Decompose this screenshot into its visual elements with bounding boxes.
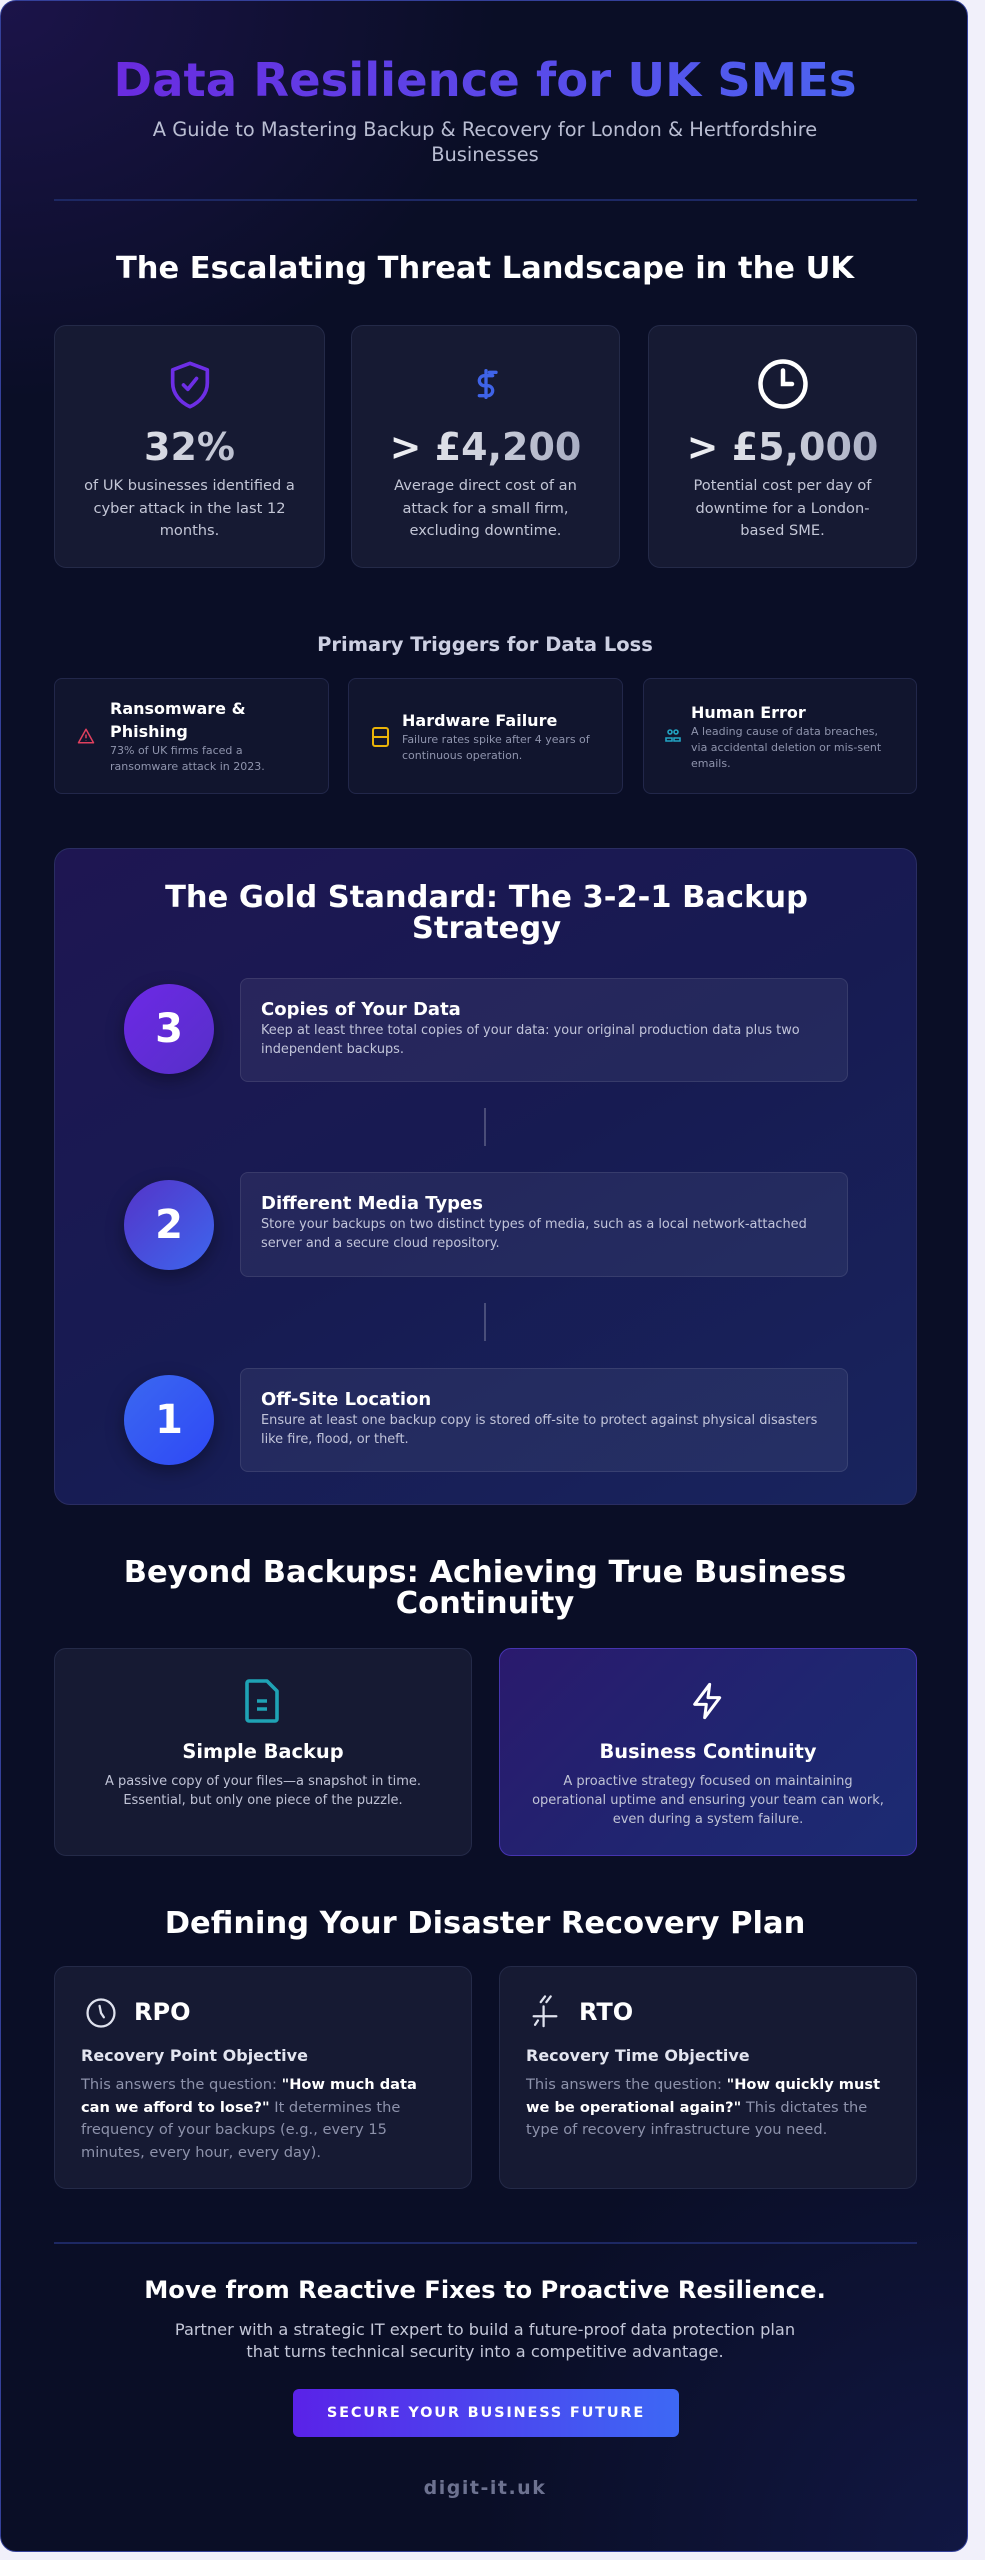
card: RTO — [499, 1966, 917, 2189]
box: media: Different Media Types — [261, 1193, 483, 1214]
stat card: £4,200 — [351, 325, 620, 568]
circle 2 — [124, 1180, 214, 1270]
icon: RPO clock — [86, 1998, 116, 2028]
trigger: ransomware: 73% of UK firms faced a — [110, 744, 243, 757]
card: RPO — [54, 1966, 472, 2189]
card: business continuity: A proactive strategy focused on maintaining — [563, 1774, 853, 1789]
heading: disaster recovery: Defining Your Disaster Recovery Plan — [165, 1906, 805, 1941]
card: RTO: type of recovery infrastructure you need. — [526, 2121, 827, 2138]
trigger: human error: via accidental deletion or mis-sent — [691, 740, 881, 754]
card: RTO: RTO — [579, 1998, 633, 2026]
card: business continuity — [499, 1648, 917, 1856]
card: RPO: minutes, every hour, every day). — [81, 2144, 321, 2161]
trigger: human error: Human Error — [691, 702, 806, 722]
icon: clock — [758, 359, 808, 409]
subtitle — [152, 118, 817, 166]
circle 2: 2 — [155, 1202, 183, 1248]
circle 1 — [124, 1375, 214, 1465]
card: simple backup: A passive copy of your files—a snapshot in time. — [105, 1774, 421, 1789]
icon: lightning — [693, 1682, 722, 1720]
box: copies: Copies of Your Data — [261, 999, 461, 1020]
circle 1: 1 — [155, 1397, 183, 1443]
box: offsite: Off-Site Location — [261, 1389, 431, 1410]
card: RPO: Recovery Point Objective — [81, 2046, 308, 2065]
stat card: £4,200: attack for a small firm, — [402, 500, 569, 516]
stat card: £5,000: downtime for a London- — [695, 500, 870, 516]
CTA text — [175, 2320, 795, 2361]
heading: threat landscape: The Escalating Threat Landscape in the UK — [116, 251, 854, 286]
card: RPO: can we afford to lose?" It determines the — [81, 2099, 400, 2116]
card: business continuity: Business Continuity — [600, 1740, 816, 1763]
stat card: £5,000 — [648, 325, 917, 568]
card: business continuity: even during a system failure. — [613, 1812, 803, 1827]
circle 3 — [124, 984, 214, 1074]
circle 3: 3 — [155, 1006, 183, 1052]
box: copies: Keep at least three total copies of your data: your original production data plus two — [261, 1023, 800, 1038]
icon: people — [665, 729, 681, 742]
icon: currency — [478, 369, 498, 399]
stat card: 32%: of UK businesses identified a — [84, 477, 295, 494]
CTA text: Partner with a strategic IT expert to build a future-proof data protection plan — [175, 2320, 795, 2339]
icon: server — [372, 727, 389, 747]
card: RTO: Recovery Time Objective — [526, 2046, 750, 2065]
card: RPO: frequency of your backups (e.g., every 15 — [81, 2121, 387, 2138]
card: RTO: we be operational again?" This dictates the — [526, 2099, 867, 2116]
stat card: 32%: cyber attack in the last 12 — [93, 500, 286, 516]
card: simple backup: Essential, but only one piece of the puzzle. — [123, 1793, 403, 1808]
stat card: 32% — [54, 325, 325, 568]
box: offsite — [240, 1368, 848, 1472]
heading: beyond backups: Beyond Backups: Achieving True Business — [124, 1555, 846, 1590]
trigger: human error: emails. — [691, 756, 731, 770]
stat card: 32%: 32% — [144, 425, 235, 469]
button: SECURE YOUR BUSINESS FUTURE — [327, 2405, 645, 2421]
icon: RTO — [532, 1995, 558, 2028]
card: RTO: This answers the question: "How quickly must — [526, 2076, 880, 2093]
card: RPO: This answers the question: "How much data — [81, 2076, 417, 2093]
card: simple backup: Simple Backup — [182, 1740, 344, 1763]
box: media: Store your backups on two distinct types of media, such as a local network-attached — [261, 1217, 807, 1232]
icon: file — [245, 1679, 279, 1723]
subtitle: Businesses — [431, 143, 539, 166]
box: offsite: Ensure at least one backup copy is stored off-site to protect against physical disasters — [261, 1413, 817, 1428]
heading: beyond backups: Continuity — [396, 1586, 574, 1621]
box: copies: independent backups. — [261, 1042, 404, 1057]
trigger: hardware — [348, 678, 623, 794]
icon: warning — [78, 728, 94, 744]
stat card: £4,200: > £4,200 — [390, 425, 581, 469]
subheading: primary triggers: Primary Triggers for Data Loss — [317, 633, 653, 656]
stat card: £5,000: based SME. — [740, 522, 825, 539]
trigger: hardware: Failure rates spike after 4 years of — [402, 732, 590, 746]
box: offsite: like fire, flood, or theft. — [261, 1432, 409, 1447]
box: media — [240, 1172, 848, 1277]
trigger: hardware: Hardware Failure — [402, 710, 557, 730]
CTA heading: Move from Reactive Fixes to Proactive Resilience. — [144, 2276, 826, 2304]
card: business continuity: operational uptime and ensuring your team can work, — [532, 1793, 884, 1808]
footer brand: digit-it.uk — [424, 2477, 546, 2499]
subtitle: A Guide to Mastering Backup & Recovery for London & Hertfordshire — [153, 118, 817, 141]
panel: 3-2-1 strategy — [54, 848, 917, 1505]
trigger: ransomware — [54, 678, 329, 794]
box: copies — [240, 978, 848, 1082]
trigger: ransomware: ransomware attack in 2023. — [110, 760, 265, 773]
step 2 — [120, 1172, 848, 1280]
card: RPO: RPO — [134, 1998, 190, 2026]
trigger: hardware: continuous operation. — [402, 748, 522, 762]
heading: gold standard: The Gold Standard: The 3-2-1 Backup — [165, 880, 808, 915]
trigger: ransomware: Phishing — [110, 722, 188, 741]
box: media: server and a secure cloud repository. — [261, 1236, 500, 1251]
heading: beyond backups — [124, 1555, 846, 1621]
trigger: human error: A leading cause of data breaches, — [691, 724, 878, 738]
heading: gold standard — [165, 880, 808, 946]
title: Data Resilience for UK SMEs — [113, 53, 857, 107]
step 3 — [120, 978, 848, 1084]
stat card: £4,200: excluding downtime. — [410, 522, 561, 539]
heading: gold standard: Strategy — [412, 911, 561, 946]
CTA text: that turns technical security into a competitive advantage. — [246, 2342, 724, 2361]
trigger: ransomware: Ransomware & — [110, 699, 246, 718]
step 1 — [120, 1368, 848, 1476]
stat card: 32%: months. — [160, 522, 219, 539]
stat card: £5,000: Potential cost per day of — [694, 477, 871, 494]
stat card: £5,000: > £5,000 — [687, 425, 878, 469]
icon: shield — [170, 362, 210, 408]
trigger: human error — [643, 678, 917, 794]
button — [293, 2389, 679, 2437]
stat card: £4,200: Average direct cost of an — [394, 477, 577, 494]
card: simple backup — [54, 1648, 472, 1856]
